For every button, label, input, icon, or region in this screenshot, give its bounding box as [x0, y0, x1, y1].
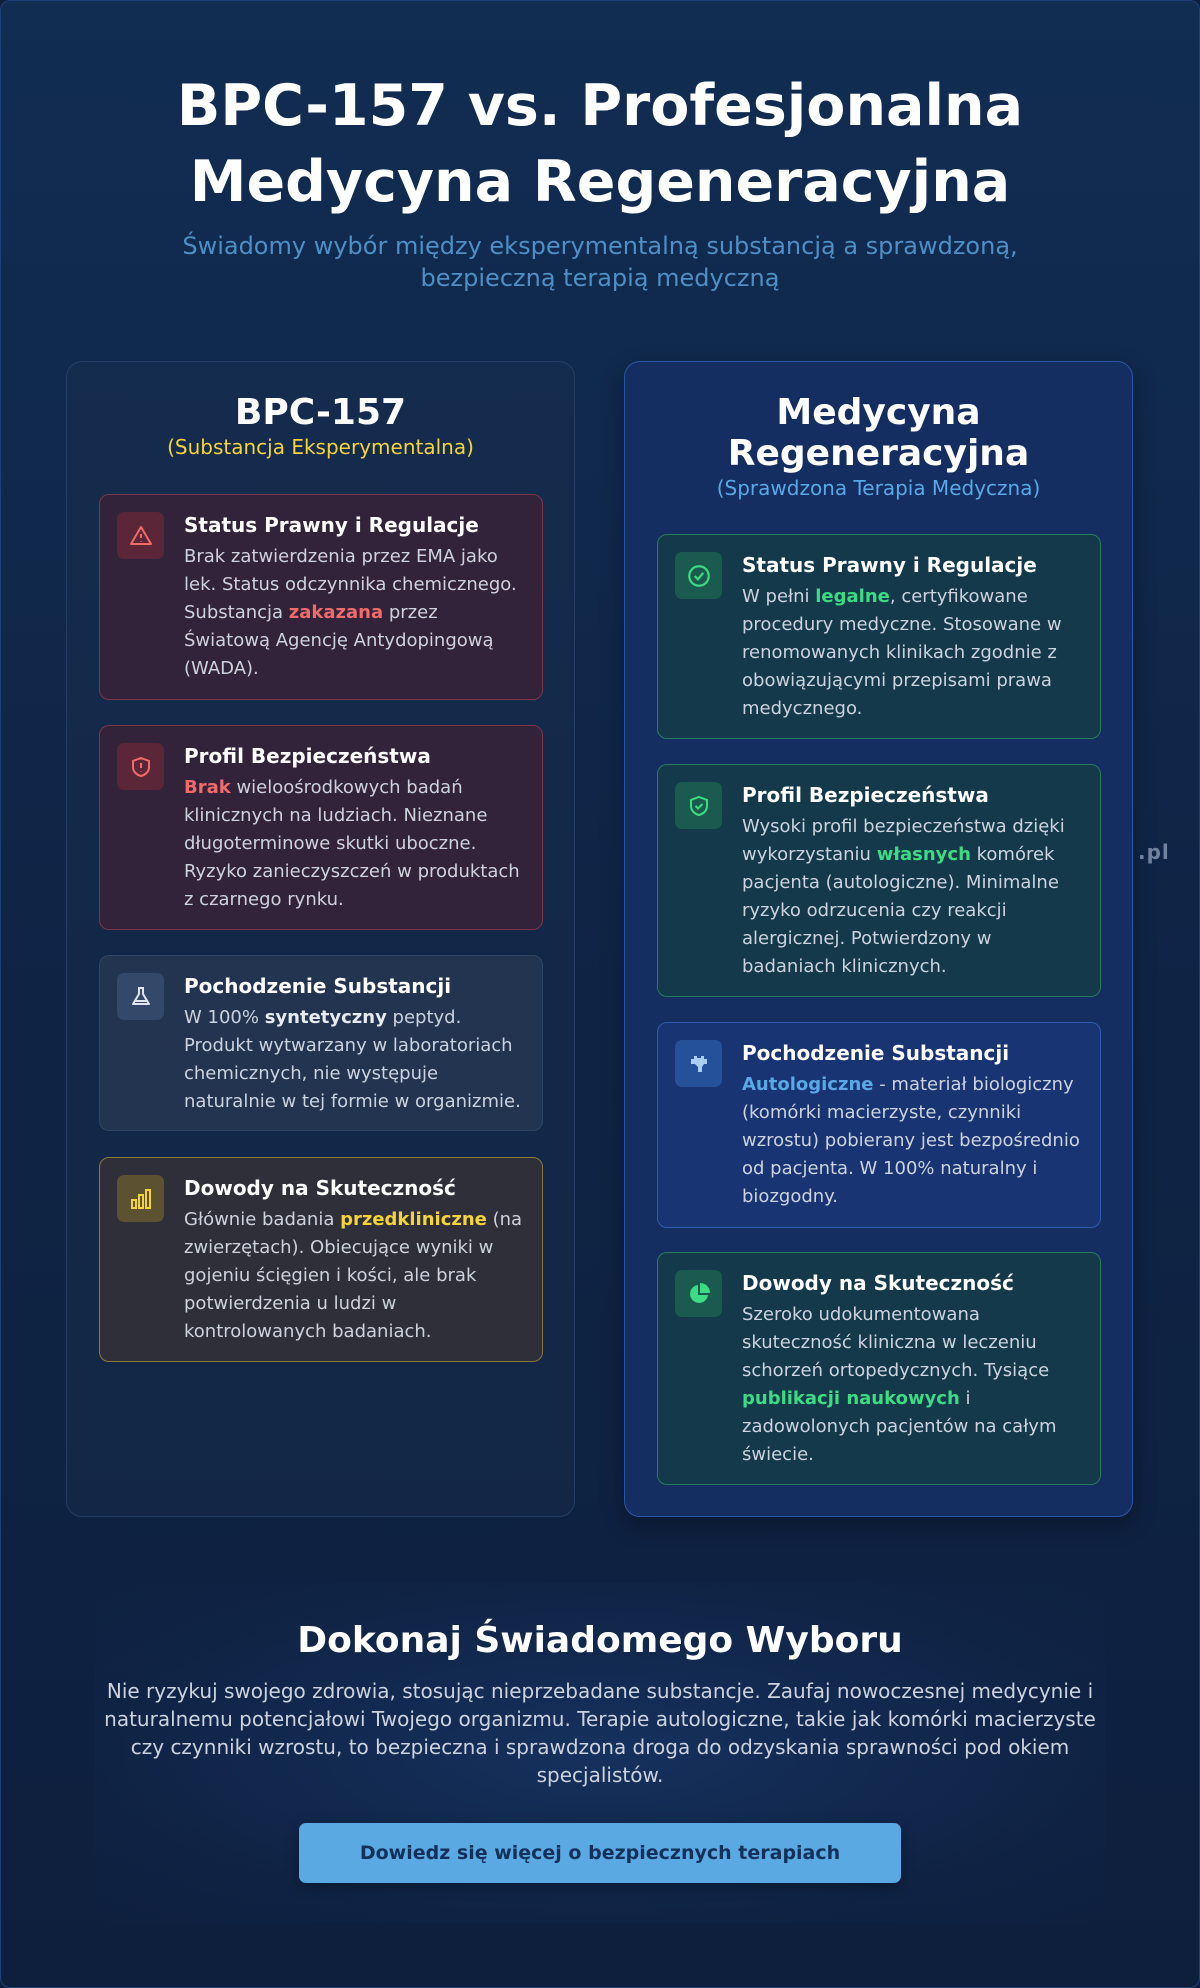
subtitle: bezpieczną terapią medyczną	[421, 264, 779, 292]
cta paragraph: Nie ryzykuj swojego zdrowia, stosując nieprzebadane substancje. Zaufaj nowoczesnej medycynie i naturalnemu potencjałowi Twojego organizmu. Terapie autologiczne, takie jak komórki macierzyste czy czynniki wzrostu, to bezpieczna i sprawdzona droga do odzyskania sprawności pod okiem specjalistów.	[104, 1679, 1096, 1787]
icon: check circle	[675, 552, 722, 599]
card: dowody: Głównie badania przedkliniczne (na zwierzętach). Obiecujące wyniki w gojeniu ścięgien i kości, ale brak potwierdzenia u ludzi w kontrolowanych badaniach.	[184, 1209, 522, 1342]
title: Medycyna Regeneracyjna	[190, 149, 1010, 215]
card: profil bezpieczenstwa	[99, 725, 543, 930]
card: pochodzenie	[657, 1022, 1101, 1228]
card: dowody: Dowody na Skuteczność	[742, 1271, 1014, 1295]
icon: shield alert	[117, 743, 164, 790]
subtitle	[182, 232, 1018, 292]
card: status prawny	[657, 534, 1101, 739]
card: status prawny: W pełni legalne, certyfikowane procedury medyczne. Stosowane w renomowanych klinikach zgodnie z obowiązującymi przepisami prawa medycznego.	[742, 586, 1062, 719]
card: dowody: Szeroko udokumentowana skuteczność kliniczna w leczeniu schorzeń ortopedycznych. Tysiące publikacji naukowych i zadowolonych pacjentów na całym świecie.	[742, 1304, 1056, 1465]
icon: bar chart	[117, 1175, 164, 1222]
card: dowody	[657, 1252, 1101, 1485]
panel heading	[728, 392, 1029, 474]
panel heading: BPC-157: BPC-157	[235, 392, 406, 433]
title	[177, 73, 1023, 215]
cta button: Dowiedz się więcej o bezpiecznych terapiach	[360, 1842, 840, 1864]
card: status prawny: Brak zatwierdzenia przez EMA jako lek. Status odczynnika chemicznego. Substancja zakazana przez Światową Agencję Antydopingową (WADA).	[184, 546, 517, 679]
icon: shield check	[675, 782, 722, 829]
card: dowody: Dowody na Skuteczność	[184, 1176, 456, 1200]
icon: flask	[117, 973, 164, 1020]
icon: pie chart	[675, 1270, 722, 1317]
card: profil bezpieczenstwa: Brak wieloośrodkowych badań klinicznych na ludziach. Nieznane długoterminowe skutki uboczne. Ryzyko zanieczyszczeń w produktach z czarnego rynku.	[184, 777, 520, 910]
panel: BPC-157	[66, 361, 575, 1517]
card: profil bezpieczenstwa: Profil Bezpieczeństwa	[742, 783, 989, 807]
call to action section	[95, 1583, 1105, 1923]
card: pochodzenie: Autologiczne - materiał biologiczny (komórki macierzyste, czynniki wzrostu) pobierany jest bezpośrednio od pacjenta. W 100% naturalny i biozgodny.	[742, 1074, 1080, 1207]
card: profil bezpieczenstwa	[657, 764, 1101, 997]
card: pochodzenie	[99, 955, 543, 1131]
title: BPC-157 vs. Profesjonalna	[177, 73, 1023, 139]
card: profil bezpieczenstwa: Profil Bezpieczeństwa	[184, 744, 431, 768]
card: status prawny: Status Prawny i Regulacje	[184, 513, 479, 537]
card: pochodzenie: Pochodzenie Substancji	[742, 1041, 1009, 1065]
icon: warning	[117, 512, 164, 559]
panel subheading: (Substancja Eksperymentalna)	[167, 435, 474, 459]
watermark: .pl	[1138, 840, 1170, 864]
card: status prawny: Status Prawny i Regulacje	[742, 553, 1037, 577]
card: dowody	[99, 1157, 543, 1362]
panel heading: Medycyna	[776, 392, 981, 433]
panel: medycyna regeneracyjna	[624, 361, 1133, 1517]
card: pochodzenie: W 100% syntetyczny peptyd. Produkt wytwarzany w laboratoriach chemicznych, nie występuje naturalnie w tej formie w organizmie.	[184, 1007, 521, 1112]
card: profil bezpieczenstwa: Wysoki profil bezpieczeństwa dzięki wykorzystaniu własnych komórek pacjenta (autologiczne). Minimalne ryzyko odrzucenia czy reakcji alergicznej. Potwierdzony w badaniach klinicznych.	[742, 816, 1065, 977]
cta heading: Dokonaj Świadomego Wyboru	[297, 1620, 903, 1661]
card: pochodzenie: Pochodzenie Substancji	[184, 974, 451, 998]
subtitle: Świadomy wybór między eksperymentalną substancją a sprawdzoną,	[182, 232, 1018, 260]
card: status prawny	[99, 494, 543, 700]
panel heading: Regeneracyjna	[728, 433, 1029, 474]
icon: tooth/biological	[675, 1040, 722, 1087]
cta button	[299, 1823, 901, 1883]
panel subheading: (Sprawdzona Terapia Medyczna)	[717, 476, 1040, 500]
